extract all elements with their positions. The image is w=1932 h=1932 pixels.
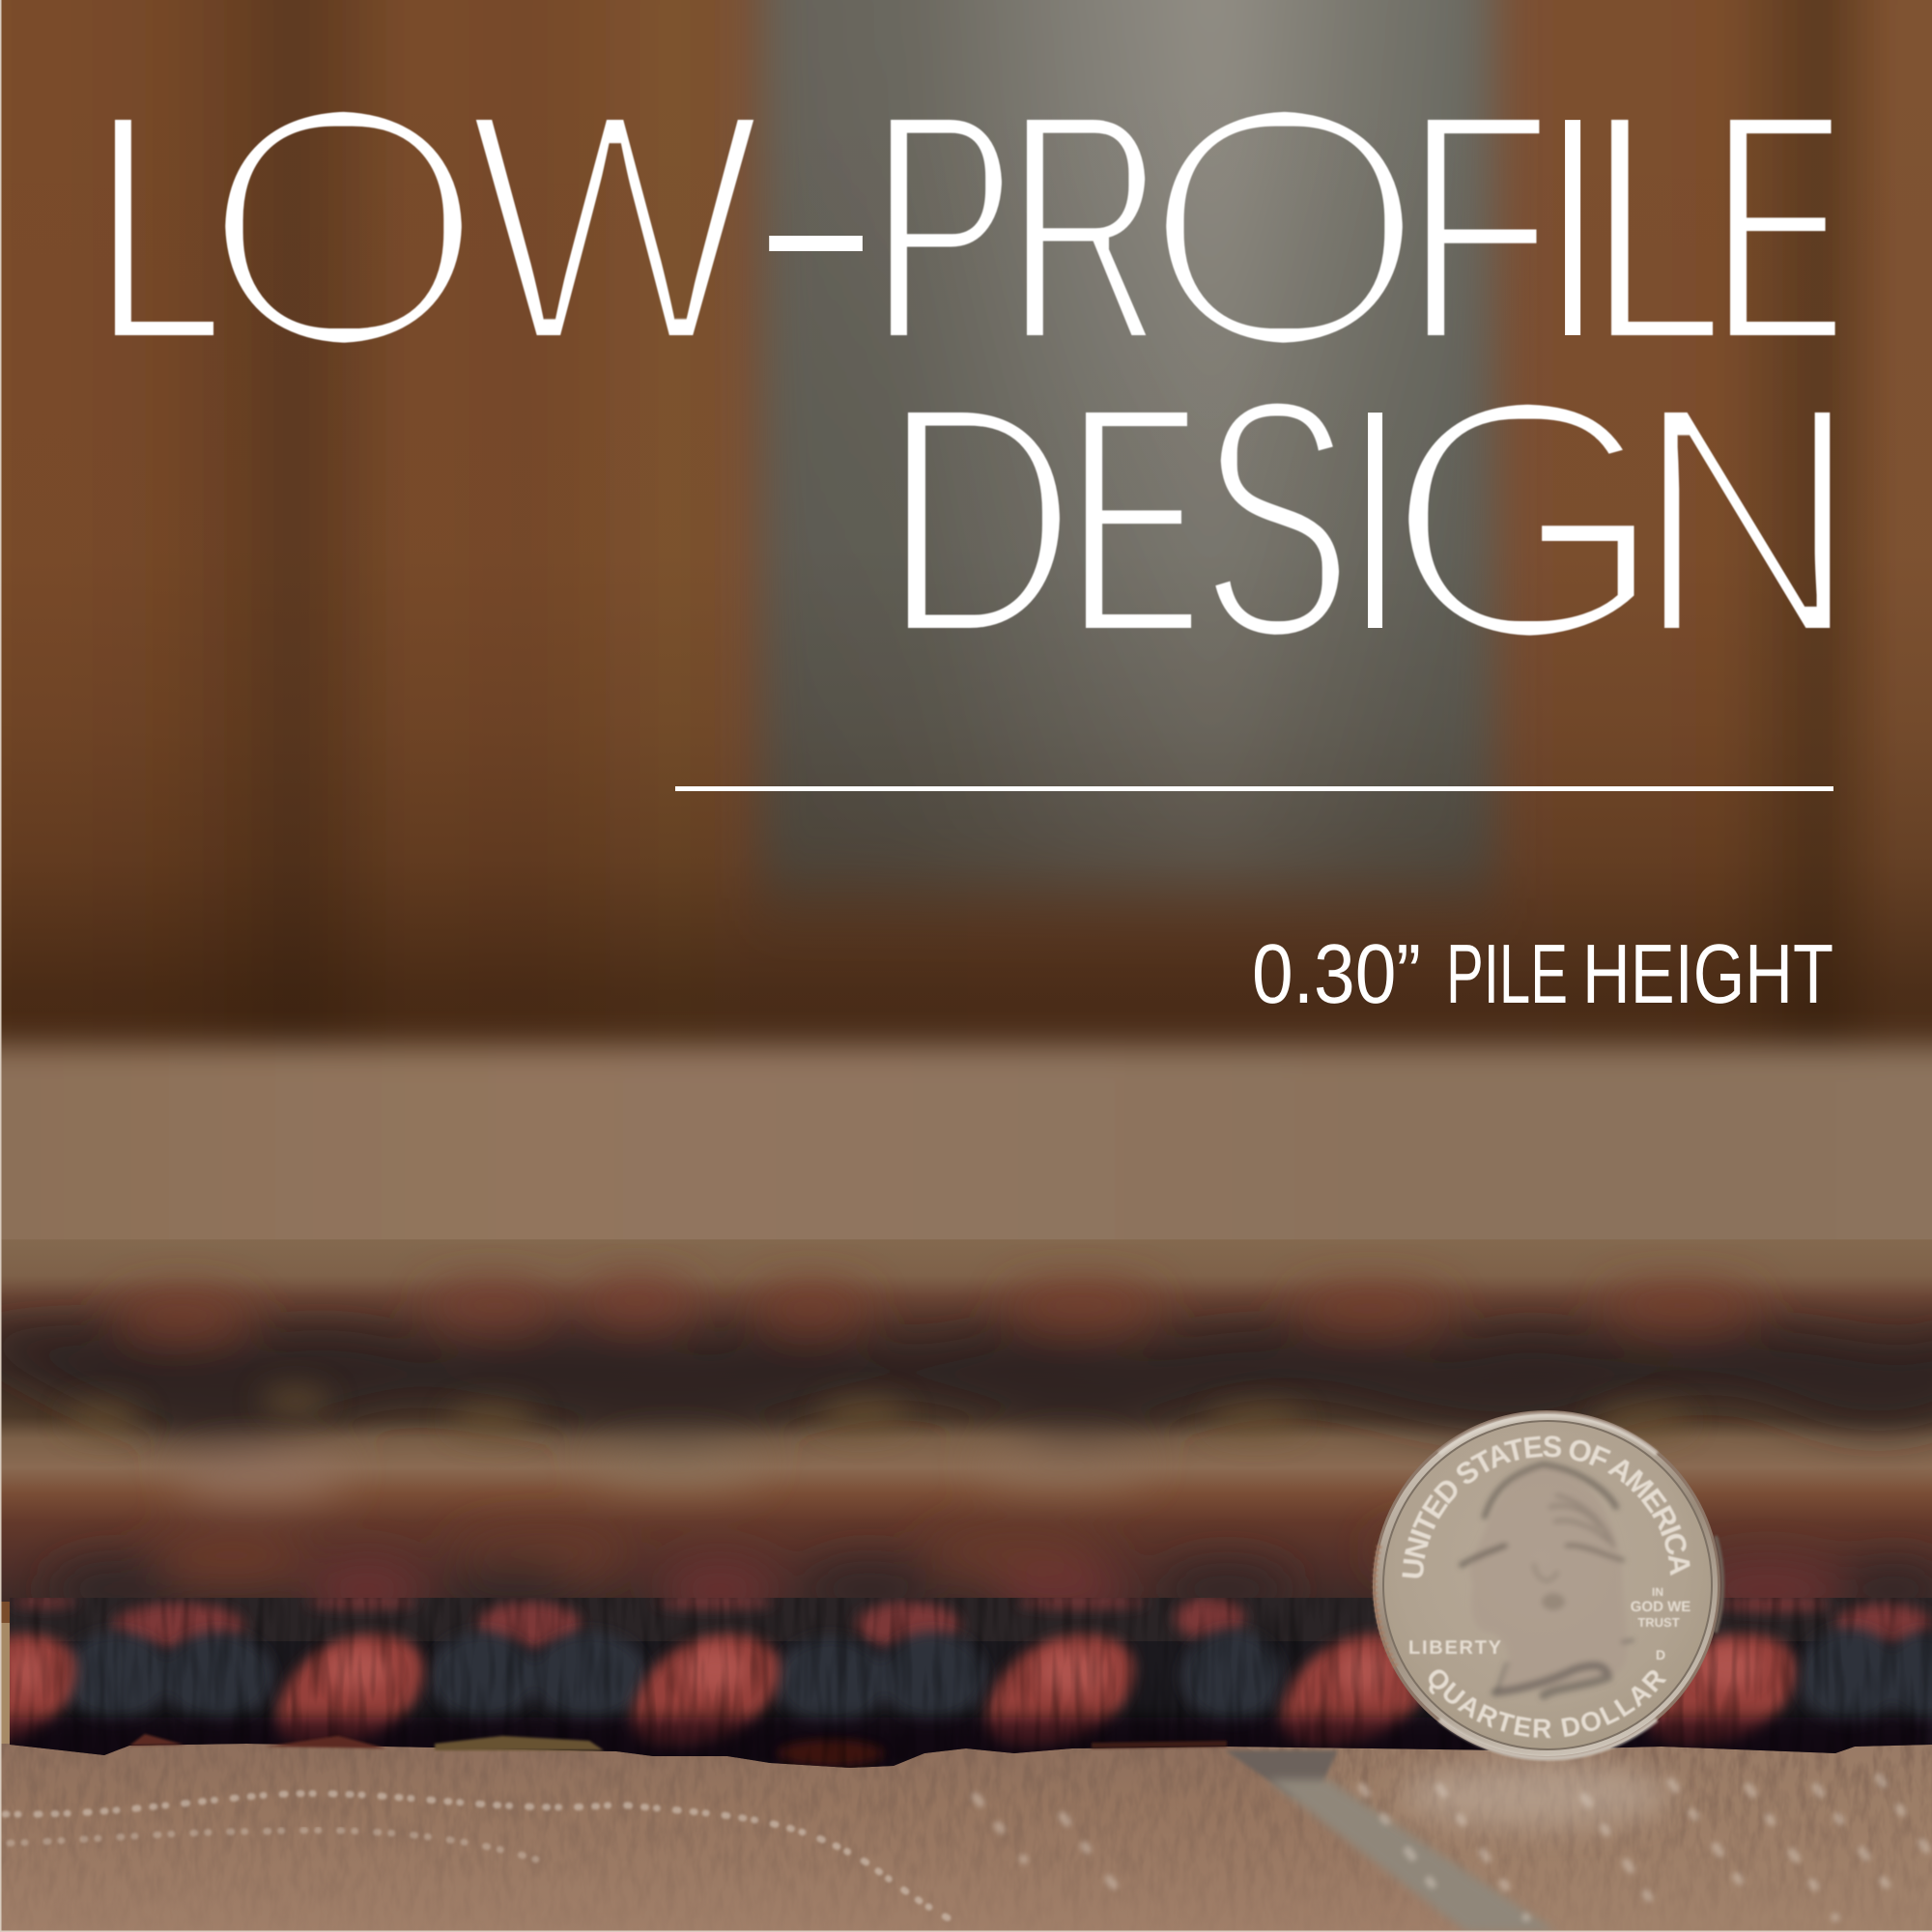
wavy dark braid band (0, 1325, 1932, 1449)
title line 2: DESIGN: N (1633, 337, 1861, 706)
title: LOW-PROFILE DESIGN (93, 37, 1861, 714)
braided rug edge in focus (0, 1595, 1932, 1776)
coin lettering: UNITED STATES OF AMERICA (1401, 1435, 1690, 1578)
divider line (675, 786, 1833, 791)
loose fibres under rug (129, 1734, 1227, 1750)
coin lettering (1401, 1435, 1690, 1739)
title line 2: DESIGN: S (1202, 328, 1351, 713)
title line 1: LOW-PROFILE (93, 37, 1844, 421)
background: blurred wall and door (0, 0, 1932, 1159)
coin lettering: IN (1652, 1585, 1663, 1599)
title line 1: LOW-PROFILE: O (1140, 37, 1429, 421)
pile height label: 0.30” (1252, 927, 1421, 1021)
coin rim highlight (1375, 1415, 1722, 1758)
title line 1: LOW-PROFILE: L (1588, 44, 1723, 413)
title line 1: LOW-PROFILE: L (93, 44, 224, 413)
plank seam (1225, 1750, 1557, 1932)
navy strands (60, 1628, 1932, 1725)
title line 1: LOW-PROFILE: R (1008, 44, 1163, 413)
pile height label: PILE (1446, 927, 1568, 1021)
title line 2: DESIGN: E (1068, 337, 1201, 706)
title line 2: DESIGN (882, 328, 1861, 714)
title line 1: LOW-PROFILE: O (199, 37, 488, 421)
coin lettering: D (1656, 1647, 1665, 1662)
rope shadow and fibre texture (0, 1598, 1932, 1776)
background: blurred far floor (0, 1045, 1932, 1306)
rug seam patch on the left edge (0, 1623, 10, 1744)
red strand highlights (14, 1643, 1760, 1694)
red strands (0, 1634, 1795, 1746)
coin lettering: QUARTER DOLLAR (1428, 1669, 1667, 1739)
wear marks on wood (5, 1777, 1930, 1922)
coin lettering: TRUST (1637, 1615, 1680, 1630)
title line 1: LOW-PROFILE: W (466, 44, 766, 413)
pile height label (1252, 927, 1833, 1021)
title line 1: LOW-PROFILE: P (871, 44, 1015, 413)
golden strand glints (66, 1387, 1690, 1435)
title line 2: DESIGN: G (1382, 329, 1669, 714)
title line 1: LOW-PROFILE: I (1549, 53, 1596, 404)
coin lettering: LIBERTY (1408, 1637, 1502, 1659)
coin reflection on floor (1401, 1762, 1671, 1828)
title line 2: DESIGN: I (1353, 346, 1397, 696)
title line 1: LOW-PROFILE: F (1406, 44, 1551, 413)
bust of Washington (1462, 1464, 1633, 1695)
title line 1: LOW-PROFILE: E (1713, 44, 1844, 413)
near floor: wood planks (0, 1734, 1932, 1932)
upper red strands (10, 1595, 1932, 1649)
coin edge (1373, 1410, 1720, 1760)
quarter coin (1372, 1410, 1725, 1762)
title line 2: DESIGN: D (882, 337, 1076, 706)
coin field (1383, 1421, 1712, 1749)
coin lettering: GOD WE (1631, 1599, 1690, 1615)
title line 1: LOW-PROFILE: - (753, 118, 880, 339)
pile height label: HEIGHT (1582, 927, 1833, 1021)
background: out-of-focus rug (0, 1239, 1932, 1618)
